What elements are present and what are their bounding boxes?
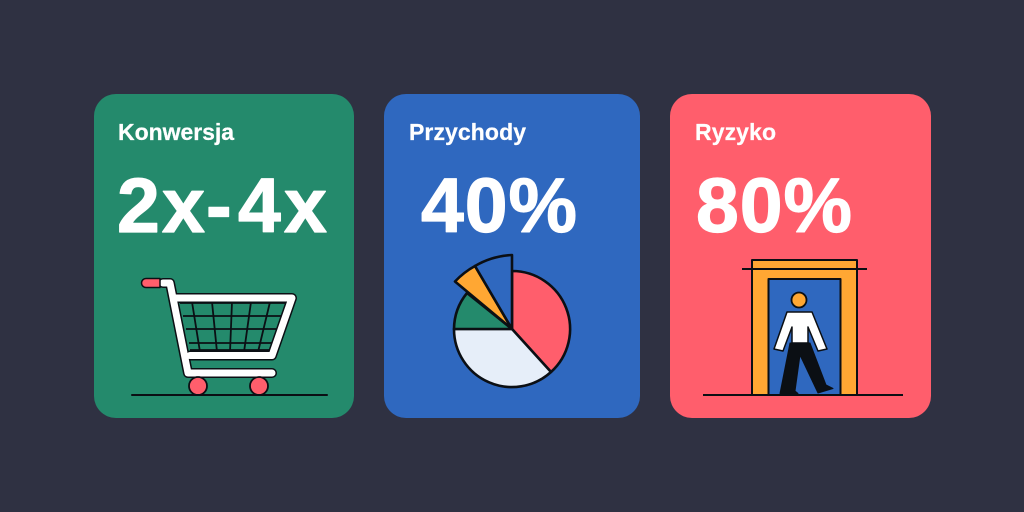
big number: 2x-4x: 2x-4x bbox=[117, 163, 327, 249]
cart wheel left bbox=[189, 377, 207, 395]
door lintel line bbox=[742, 268, 867, 270]
person head bbox=[792, 292, 806, 308]
ground line bbox=[132, 394, 327, 396]
heading: Przychody: Przychody bbox=[409, 119, 526, 145]
card background: blue bbox=[384, 94, 640, 418]
pie slice: blue, exploded bbox=[475, 255, 512, 329]
panel: Przychody bbox=[384, 94, 640, 418]
door frame bbox=[752, 260, 857, 395]
heading: Ryzyko: Ryzyko bbox=[695, 119, 776, 145]
ground line bbox=[703, 394, 903, 396]
cart basket grid bbox=[180, 302, 287, 352]
big number: 40%: 40% bbox=[421, 163, 577, 249]
person torso and arms bbox=[774, 312, 827, 351]
icon: person walking through door bbox=[703, 260, 903, 395]
card background: green bbox=[94, 94, 354, 418]
cart wheel right bbox=[250, 377, 268, 395]
person legs bbox=[780, 343, 833, 394]
big number: 80%: 80% bbox=[696, 163, 852, 249]
pie slice: red bbox=[512, 271, 570, 372]
icon: shopping cart bbox=[132, 278, 327, 395]
cart frame outline bbox=[163, 283, 292, 373]
pie slice: orange, exploded bbox=[455, 266, 512, 329]
cart frame bbox=[163, 283, 292, 373]
chart: exploded pie bbox=[454, 255, 570, 387]
heading: Konwersja: Konwersja bbox=[118, 119, 234, 145]
pie slice: white bbox=[454, 329, 551, 387]
pie slice: green bbox=[454, 293, 512, 329]
card background: red bbox=[670, 94, 931, 418]
panel: Ryzyko bbox=[670, 94, 931, 418]
door opening bbox=[768, 279, 840, 395]
panel: Konwersja bbox=[94, 94, 354, 418]
cart handle bbox=[142, 278, 160, 288]
